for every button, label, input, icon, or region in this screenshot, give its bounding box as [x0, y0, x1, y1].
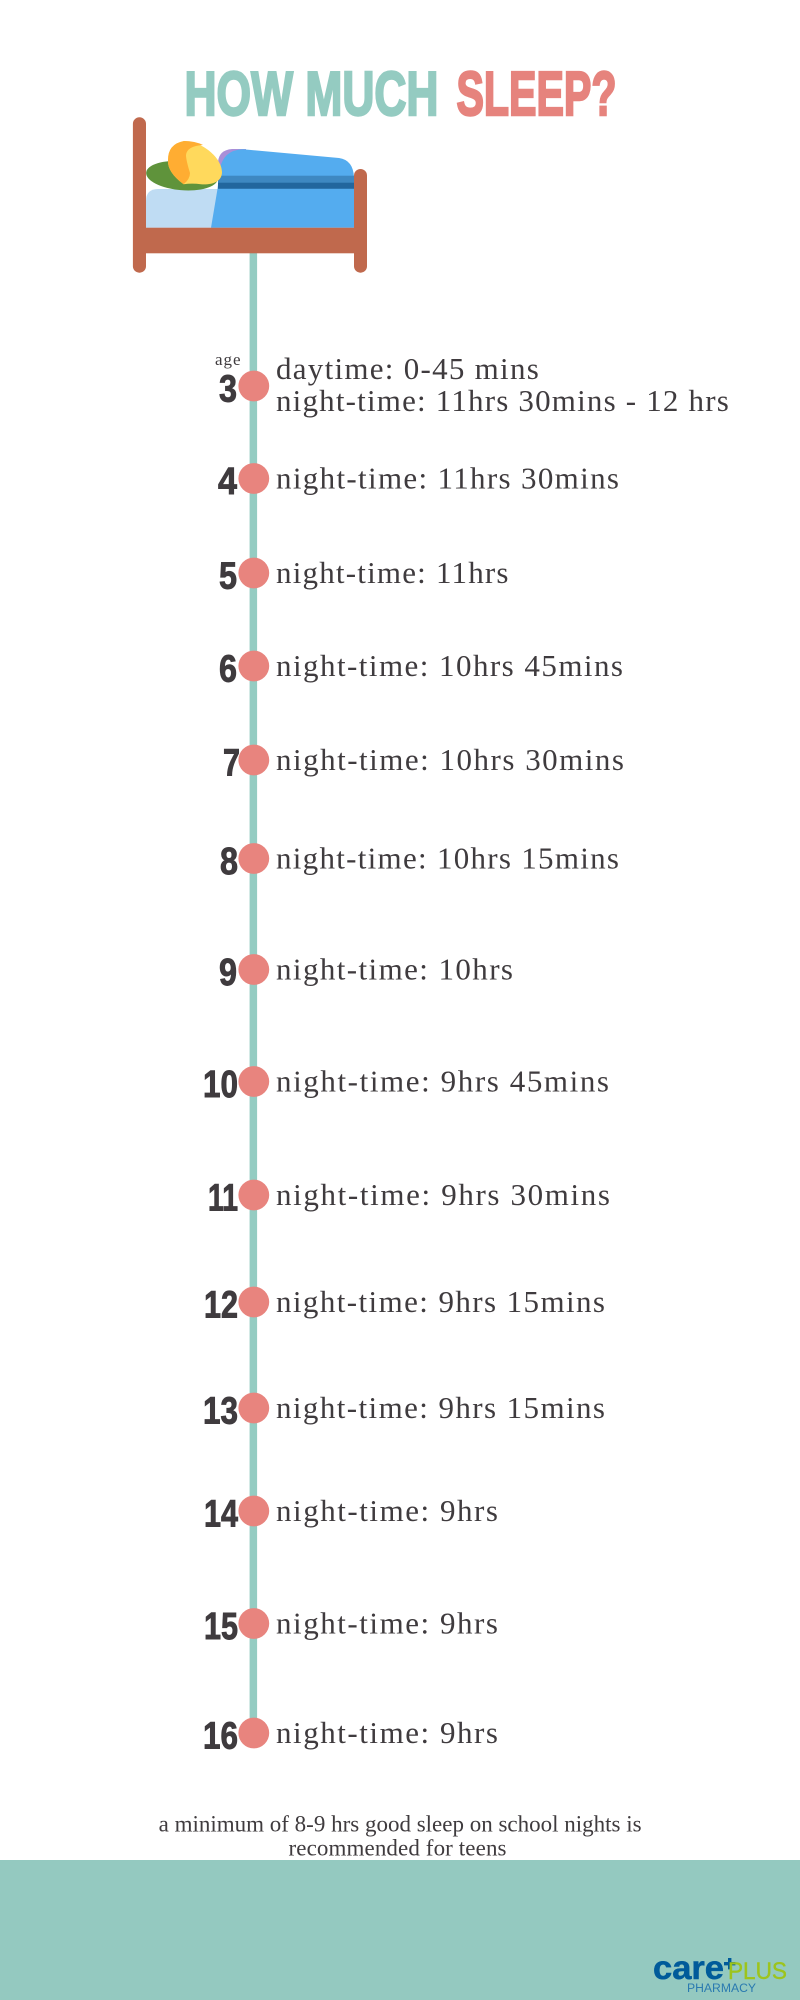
row: age 8: 8 — [220, 841, 238, 883]
row: age 16 — [203, 1715, 498, 1758]
row: age 15: 15 — [204, 1606, 238, 1648]
row: age 6: night-time: 10hrs 45mins — [276, 648, 623, 683]
footer band — [0, 1860, 800, 2000]
row: age 10 — [203, 1064, 609, 1106]
row: age 6: 6 — [219, 648, 237, 690]
row: age 7: night-time: 10hrs 30mins — [276, 742, 624, 777]
row: age 9 — [219, 952, 513, 994]
row: age 14 — [204, 1493, 498, 1536]
row: age 4: night-time: 11hrs 30mins — [276, 460, 619, 496]
title: HOW MUCH — [184, 60, 438, 129]
row: age 8: night-time: 10hrs 15mins — [276, 840, 619, 876]
row: age 5: night-time: 11hrs — [276, 555, 508, 590]
row: age 13: 13 — [203, 1390, 238, 1432]
icon: person sleeping in bed — [133, 117, 367, 273]
row: age 10: 10 — [203, 1064, 238, 1106]
row: age 16: 16 — [203, 1716, 238, 1758]
row: age 5 — [219, 555, 508, 598]
row: age 13: night-time: 9hrs 15mins — [276, 1390, 605, 1425]
blanket stripes — [218, 176, 354, 189]
row: age 3 — [219, 351, 729, 418]
row: age 11 — [208, 1177, 610, 1220]
row: age 12: night-time: 9hrs 15mins — [276, 1284, 605, 1319]
bed frame — [133, 117, 367, 273]
logo: Care Plus Pharmacy: PHARMACY — [687, 1983, 756, 1995]
row: age 11: 11 — [208, 1178, 238, 1220]
title: SLEEP? — [456, 60, 616, 129]
blanket — [211, 149, 354, 228]
footnote: recommended for teens — [288, 1836, 507, 1861]
mattress — [146, 189, 220, 228]
hair shade — [168, 141, 203, 184]
logo: Care Plus Pharmacy — [653, 1949, 787, 1995]
row: age 12 — [204, 1284, 605, 1326]
row: age 5: 5 — [219, 556, 237, 598]
age label: age — [215, 350, 240, 369]
row: age 3: 3 — [219, 368, 237, 410]
row: age 4: 4 — [218, 461, 237, 503]
logo: Care Plus Pharmacy: PLUS — [728, 1958, 787, 1985]
footnote — [159, 1812, 642, 1861]
row: age 15: night-time: 9hrs — [276, 1606, 498, 1640]
row: age 11: night-time: 9hrs 30mins — [276, 1177, 610, 1212]
row: age 14: 14 — [204, 1494, 238, 1536]
footnote: a minimum of 8-9 hrs good sleep on school nights is — [159, 1812, 642, 1837]
row: age 3: daytime: 0-45 mins — [276, 351, 539, 386]
row: age 10: night-time: 9hrs 45mins — [276, 1064, 609, 1098]
row: age 3: night-time: 11hrs 30mins - 12 hrs — [276, 383, 729, 418]
pillow — [145, 158, 219, 193]
row: age 12: 12 — [204, 1284, 238, 1326]
row: age 7: 7 — [223, 742, 240, 784]
row: age 9: night-time: 10hrs — [276, 952, 513, 986]
row: age 15 — [204, 1606, 498, 1648]
row: age 16: night-time: 9hrs — [276, 1715, 498, 1750]
row: age 9: 9 — [219, 952, 237, 994]
hair — [168, 141, 222, 184]
row: age 14: night-time: 9hrs — [276, 1493, 498, 1528]
logo: Care Plus Pharmacy: care — [653, 1949, 724, 1986]
timeline line — [250, 250, 257, 1733]
row: age 13 — [203, 1390, 605, 1432]
shoulder — [218, 149, 246, 180]
